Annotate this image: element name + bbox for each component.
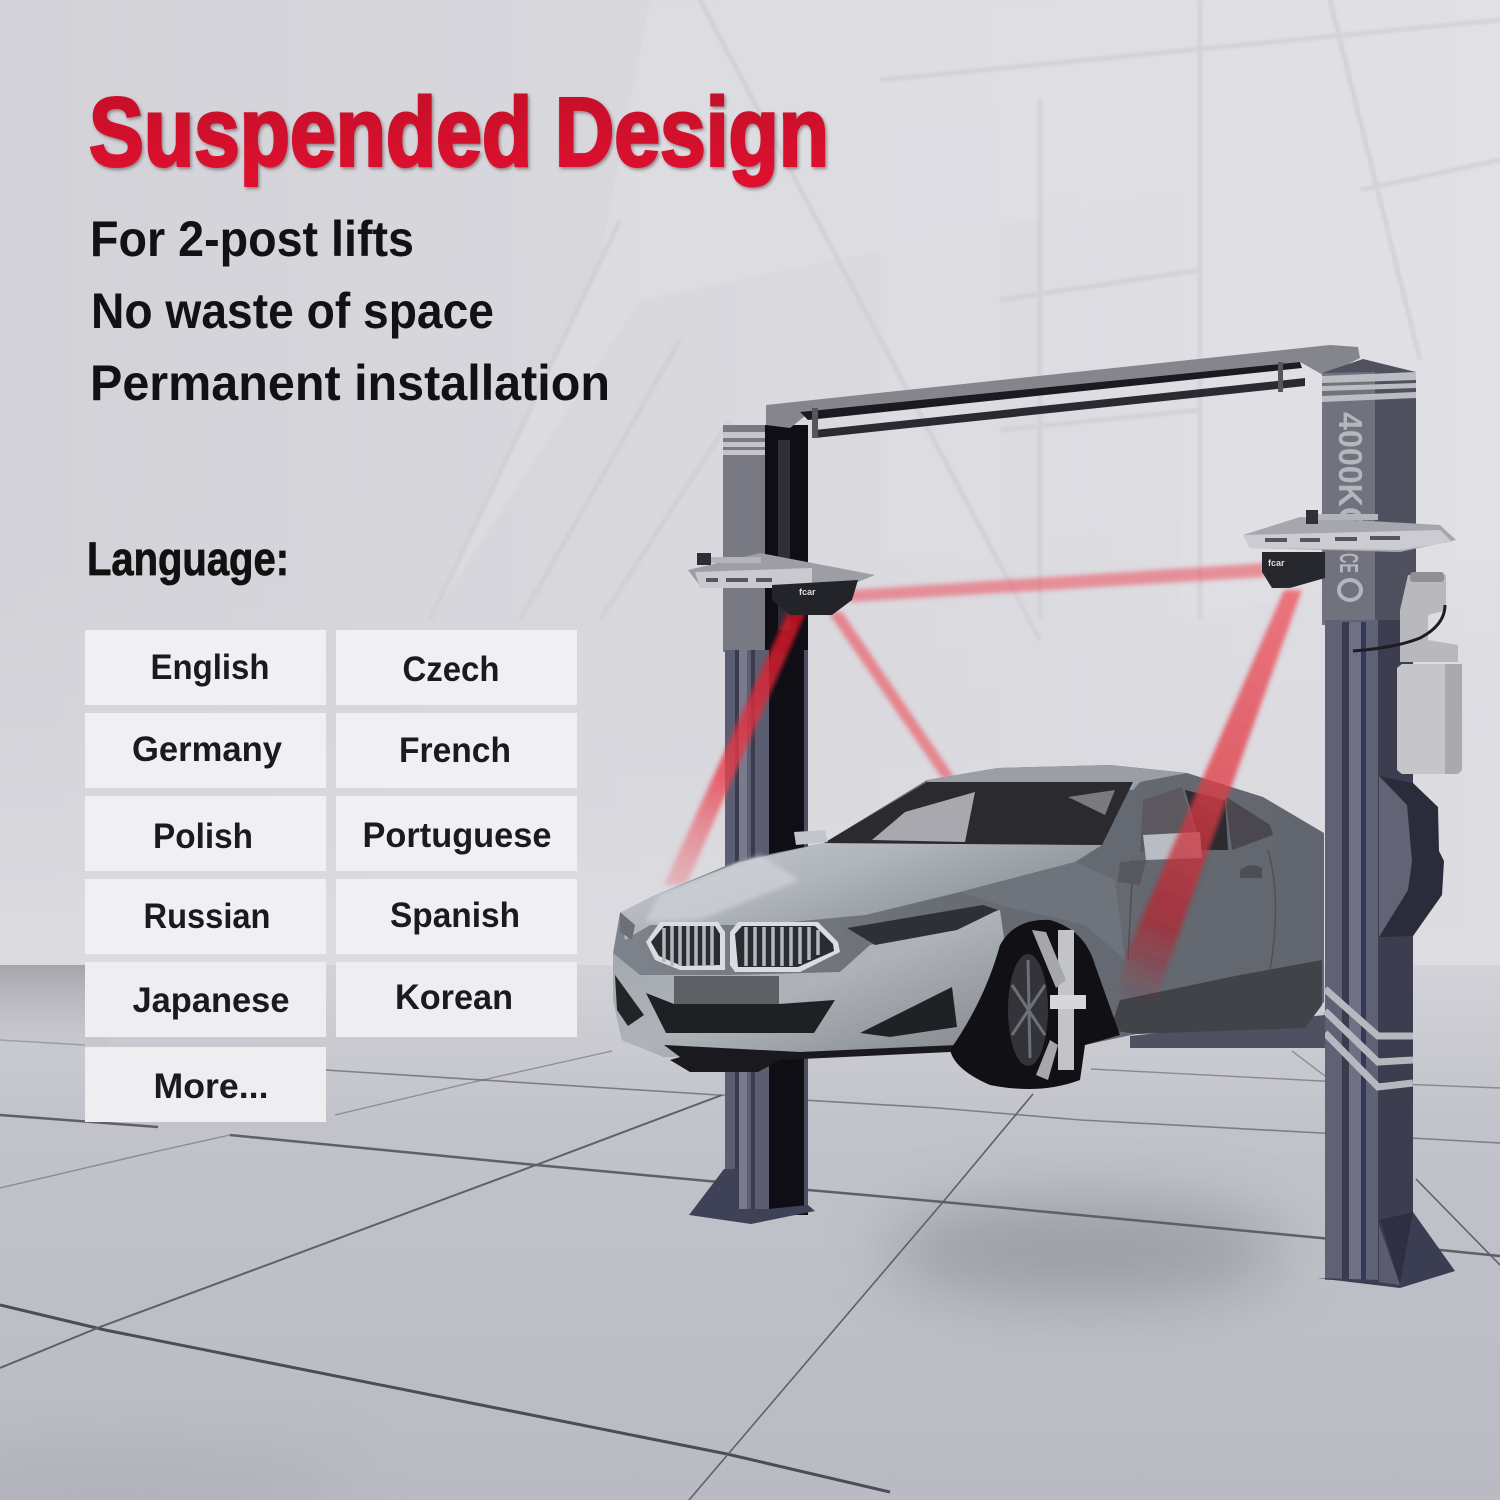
left air intake	[615, 975, 644, 1026]
left grille	[646, 922, 725, 970]
rim	[1008, 954, 1048, 1066]
right post side housing	[1379, 776, 1444, 937]
door handle	[1240, 865, 1262, 878]
front wing	[960, 862, 1125, 960]
front splitter	[664, 1045, 957, 1072]
left scanner	[772, 580, 858, 615]
right post chevrons	[1325, 989, 1413, 1087]
right post upper block	[1322, 359, 1416, 625]
hood highlight	[645, 855, 800, 922]
car body	[613, 765, 1324, 1057]
right grille	[730, 922, 840, 972]
cell: Spanish	[336, 879, 577, 954]
background: tiled floor	[0, 965, 1500, 1500]
feature: no waste of space: No waste of space	[91, 283, 494, 339]
right lift post	[1317, 359, 1455, 1288]
lower air intake	[646, 993, 835, 1033]
cell: Polish	[85, 796, 326, 871]
left post lower column	[725, 650, 769, 1215]
windshield	[824, 782, 1133, 845]
panel: language grid	[85, 630, 577, 1122]
right air intake	[860, 987, 957, 1037]
right headlight	[847, 905, 998, 945]
overhead beam	[766, 345, 1360, 438]
cell: Germany: Germany	[132, 730, 283, 769]
laser: left scanner to right scanner	[850, 563, 1265, 602]
pump motor	[1400, 575, 1458, 662]
front bumper	[613, 910, 1005, 1057]
side windows	[1140, 787, 1200, 852]
rocker shadow	[1110, 960, 1322, 1034]
wheel arch and tyre	[950, 920, 1120, 1089]
cell: Portuguese	[336, 796, 577, 871]
right post lower column	[1325, 620, 1380, 1280]
title: Suspended Design	[89, 78, 829, 186]
cell: Korean	[336, 962, 577, 1037]
cell: Japanese	[85, 962, 326, 1037]
left post upper block	[723, 425, 765, 652]
feature: permanent installation: Permanent installation	[90, 355, 610, 411]
left mirror	[794, 830, 828, 845]
title: Suspended Design	[90, 80, 830, 188]
cell: Russian	[85, 879, 326, 954]
cell: Portuguese: Portuguese	[362, 816, 552, 855]
cell: Polish: Polish	[153, 817, 253, 856]
cell: French: French	[399, 731, 511, 770]
number plate	[674, 976, 779, 1004]
cell: Japanese: Japanese	[132, 981, 290, 1020]
right post base	[1317, 1212, 1455, 1288]
laser: left scanner down-left	[664, 612, 806, 885]
cell: Spanish: Spanish	[390, 896, 520, 935]
right scanner	[1262, 552, 1325, 588]
oil tank	[1397, 664, 1462, 774]
right lift post: CE	[1334, 553, 1364, 573]
hydraulic hose	[1353, 605, 1445, 651]
cell: Korean: Korean	[395, 978, 513, 1017]
cell: Russian: Russian	[144, 897, 270, 936]
laser: right scanner down through car	[1118, 590, 1302, 1000]
left target bracket: fcar	[799, 587, 816, 597]
feature list	[90, 211, 610, 411]
background: hall wall	[0, 0, 1500, 1000]
cell: More: More...	[154, 1067, 268, 1106]
left target bracket	[688, 553, 875, 615]
right target bracket	[1243, 510, 1456, 588]
roof edge	[927, 765, 1187, 790]
left post base	[689, 1169, 815, 1224]
lift arm	[1130, 1015, 1325, 1048]
hydraulic pump	[1353, 572, 1462, 774]
right mirror	[1143, 832, 1202, 860]
left headlight	[620, 912, 635, 940]
cell: Germany	[85, 713, 326, 788]
right target bracket: fcar	[1268, 558, 1285, 568]
capacity lettering: 4000KG	[1332, 412, 1369, 532]
cell: Czech: Czech	[402, 650, 500, 689]
laser: left scanner to car roof	[828, 612, 955, 778]
cell: English: English	[150, 648, 270, 687]
door shut line	[1128, 850, 1276, 970]
left lift post	[689, 425, 815, 1224]
language heading: Language:	[87, 532, 289, 585]
cell: Czech	[336, 630, 577, 705]
cell: English	[85, 630, 326, 705]
cell: French	[336, 713, 577, 788]
hood	[620, 843, 1102, 940]
left post dark face	[765, 425, 808, 1215]
wheel alignment clamp	[1032, 930, 1086, 1080]
feature: for 2-post lifts: For 2-post lifts	[90, 211, 414, 267]
car	[613, 765, 1324, 1089]
cell: More	[85, 1047, 326, 1122]
